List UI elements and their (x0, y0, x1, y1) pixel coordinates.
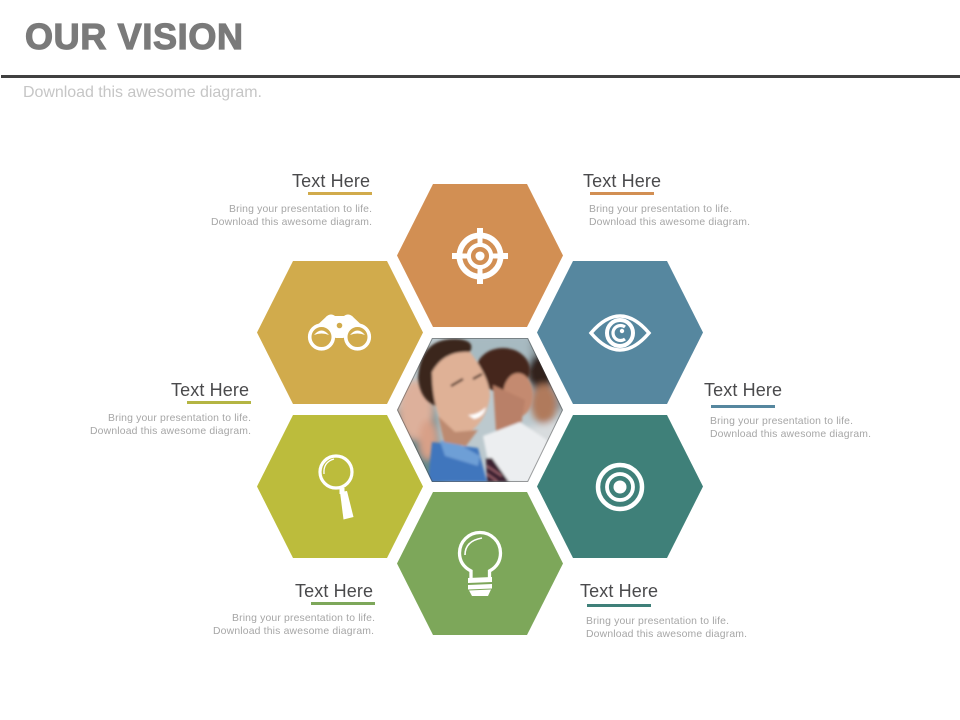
title: OUR VISION (25, 16, 243, 57)
callout: bottom right: Bring your presentation to life. (586, 616, 729, 627)
icon: magnifying glass (320, 456, 354, 520)
callout: middle right: Bring your presentation to life. (710, 416, 853, 427)
callout: top left (211, 171, 372, 228)
hexagon: gold binoculars (257, 261, 423, 404)
subtitle: Download this awesome diagram. (23, 84, 262, 101)
hexagon: olive magnifier (257, 415, 423, 558)
callout: top right (583, 171, 750, 228)
hexagon: orange target (397, 184, 563, 327)
hexagon: teal target (537, 415, 703, 558)
callout: middle right: Text Here (704, 380, 782, 400)
hexagon: blue eye (537, 261, 703, 404)
header rule (1, 75, 960, 78)
callout: bottom right (580, 581, 747, 640)
callout: middle left: Bring your presentation to life. (108, 413, 251, 424)
callout: top right: Bring your presentation to life. (589, 204, 732, 215)
icon: eye (591, 316, 649, 350)
callout: bottom left (213, 581, 375, 637)
callout: middle right: Download this awesome diagram. (710, 429, 871, 440)
callout: top left: Bring your presentation to life. (229, 204, 372, 215)
callout: bottom left: Download this awesome diagram. (213, 626, 374, 637)
icon: crosshair target (452, 228, 508, 284)
callout: bottom left: Text Here (295, 581, 373, 601)
hexagon: green lightbulb (397, 492, 563, 635)
callout: bottom left: Bring your presentation to life. (232, 613, 375, 624)
callout: top right: Text Here (583, 171, 661, 191)
callout: top left: Text Here (292, 171, 370, 191)
callout: bottom right: Download this awesome diagram. (586, 629, 747, 640)
callout: bottom right: Text Here (580, 581, 658, 601)
icon: lightbulb (460, 532, 500, 596)
callout: middle right (704, 380, 871, 440)
callout: top right: Download this awesome diagram. (589, 217, 750, 228)
icon: binoculars (310, 314, 369, 349)
icon: concentric circles (598, 465, 642, 509)
callout: top left: Download this awesome diagram. (211, 217, 372, 228)
center photo hexagon (397, 338, 563, 482)
callout: middle left: Text Here (171, 380, 249, 400)
callout: middle left (90, 380, 251, 437)
callout: middle left: Download this awesome diagram. (90, 426, 251, 437)
